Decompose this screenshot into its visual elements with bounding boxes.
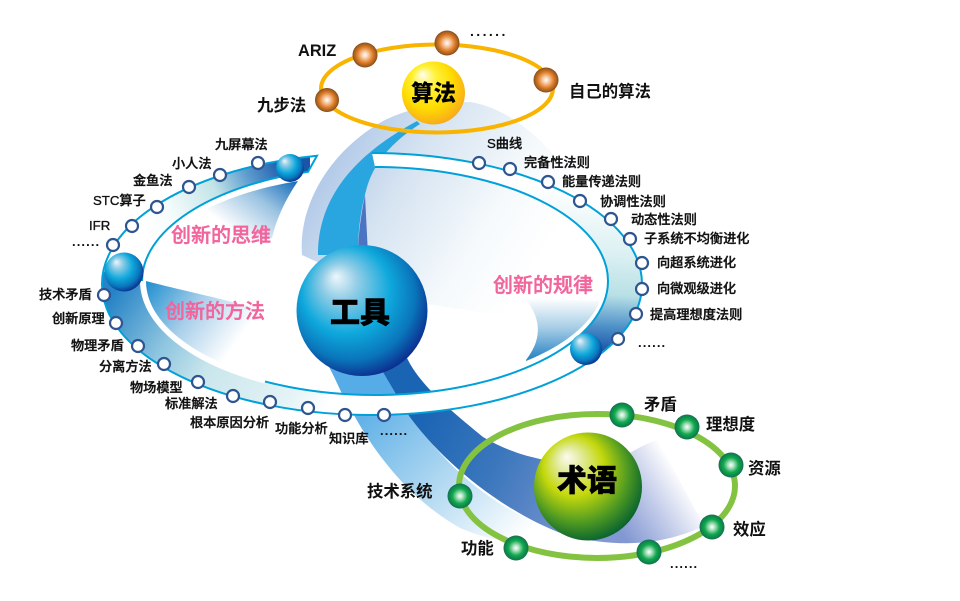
orbit labels: 效应	[733, 520, 766, 539]
orbit nodes	[448, 402, 744, 564]
ring of tools	[95, 145, 655, 422]
sphere: 算法	[402, 62, 465, 124]
labels: law: 动态性法则	[631, 211, 697, 227]
labels: method: 根本原因分析	[190, 415, 269, 430]
labels: law: 能量传递法则	[562, 173, 641, 189]
small ball: thinking	[276, 154, 304, 182]
swoosh: medium blue section	[330, 368, 396, 396]
labels: method: 物场模型	[130, 379, 183, 395]
ring inner white edge	[142, 281, 265, 382]
orbit labels: 九步法	[257, 96, 306, 115]
labels: method	[39, 286, 408, 446]
labels: method: 分离方法	[99, 358, 152, 374]
labels: thinking: STC算子	[93, 192, 146, 208]
labels: method: 标准解法	[165, 395, 218, 411]
sphere: 术语: 术语	[557, 465, 617, 498]
labels: law: 子系统不均衡进化	[644, 230, 750, 246]
small ball: method	[104, 252, 144, 292]
heading: 创新的规律: 创新的规律	[493, 274, 593, 297]
labels: method: ......	[380, 423, 408, 438]
swoosh: fading lavender tail	[570, 440, 704, 543]
ring white base	[102, 153, 642, 415]
labels: law: 向微观级进化	[657, 281, 736, 296]
sphere: 工具	[296, 245, 428, 376]
orbit labels: 理想度	[706, 415, 755, 434]
swoosh: dark blue lower band	[383, 358, 595, 538]
labels: law: 向超系统进化	[657, 254, 736, 270]
orbit labels	[367, 396, 781, 571]
sphere: 算法: 算法	[411, 80, 456, 106]
swoosh: bright blue band	[318, 121, 420, 255]
terminology orbit	[367, 396, 781, 571]
orbit labels: 功能	[461, 539, 494, 558]
labels: method: 物理矛盾	[71, 338, 124, 353]
orbit labels: 矛盾	[644, 396, 677, 414]
orbit labels	[257, 23, 651, 115]
labels: thinking: 金鱼法	[133, 172, 173, 188]
heading: 创新的方法: 创新的方法	[165, 300, 265, 323]
ring outline	[102, 153, 642, 415]
labels: thinking: IFR	[89, 218, 110, 233]
labels: method: 知识库	[329, 430, 369, 446]
ring gradient segments	[103, 158, 641, 410]
panel: law wedge	[525, 298, 600, 361]
panel: thinking wedge	[148, 181, 298, 267]
orbit labels: ......	[670, 556, 698, 571]
small ball: law	[570, 333, 602, 365]
infographic canvas	[39, 30, 780, 568]
central swoosh	[302, 102, 704, 543]
sphere: 工具: 工具	[330, 297, 390, 330]
swoosh: light blue lower band	[328, 365, 565, 543]
labels: thinking	[72, 137, 268, 249]
swoosh: indigo inner strip	[358, 195, 368, 255]
ring nodes	[98, 157, 648, 421]
orbit ellipse	[459, 414, 735, 558]
labels: thinking: ......	[72, 234, 100, 249]
labels: law: 协调性法则	[600, 194, 666, 209]
labels: law: 完备性法则	[524, 154, 590, 170]
labels: law: ......	[638, 335, 666, 350]
labels: law	[487, 136, 750, 350]
labels: thinking: 小人法	[172, 156, 212, 171]
algorithm orbit	[257, 23, 651, 132]
labels: method: 创新原理	[52, 311, 105, 326]
orbit labels: 自己的算法	[569, 82, 651, 101]
orbit labels: ARIZ	[298, 42, 336, 60]
labels: method: 技术矛盾	[39, 286, 92, 302]
labels: law: 提高理想度法则	[650, 307, 742, 322]
orbit labels: ......	[470, 23, 508, 39]
swoosh: pale halo	[302, 102, 610, 330]
sphere: 术语	[534, 432, 642, 540]
labels: law: S曲线	[487, 136, 522, 151]
panel: method wedge	[146, 281, 300, 385]
labels: method: 功能分析	[275, 421, 328, 436]
heading: 创新的思维: 创新的思维	[171, 224, 271, 247]
orbit labels: 资源	[748, 460, 781, 478]
labels: thinking: 九屏幕法	[215, 137, 268, 152]
orbit labels: 技术系统	[367, 482, 433, 501]
orbit nodes	[315, 30, 558, 112]
orbit ellipse	[321, 44, 553, 132]
